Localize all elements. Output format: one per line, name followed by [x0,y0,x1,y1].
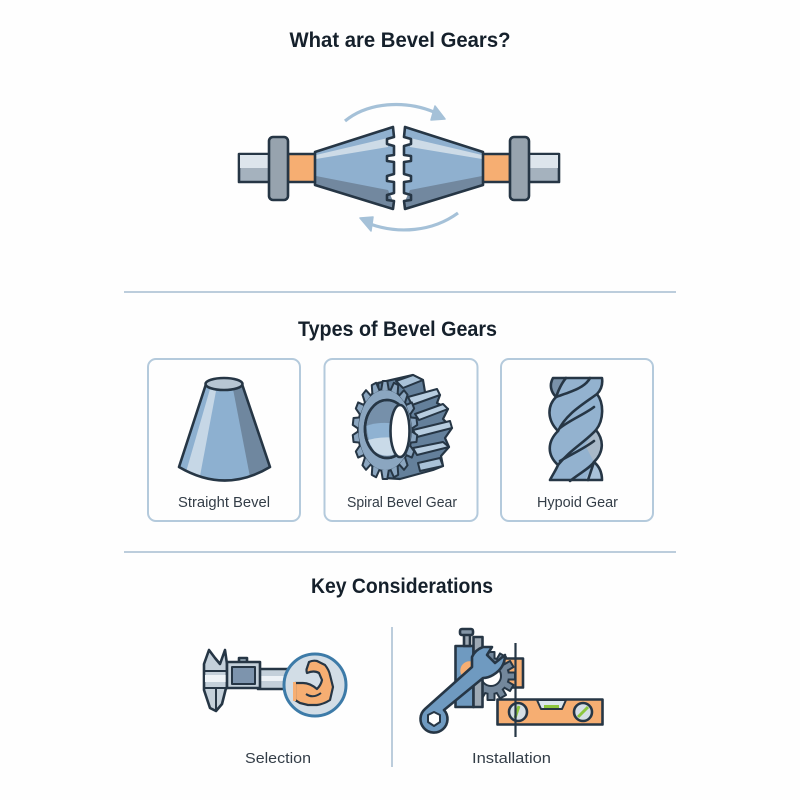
icon: gear bracket [456,629,523,707]
icon: spirit level [498,643,602,737]
title: What are Bevel Gears? [290,29,510,52]
arrow: rotation bottom [360,213,458,231]
icon: wrench [420,647,505,733]
panel: spiral bevel gear [324,359,478,521]
icon: hypoid gear [549,378,602,481]
icon: caliper [204,650,288,711]
icon: spiral bevel gear [352,375,452,479]
label: Installation [472,750,551,767]
left gear and shaft [239,127,394,209]
item: installation [420,629,602,767]
arrow: clockwise rotation top [345,105,445,121]
label: Hypoid Gear [537,494,618,511]
heading: types: Types of Bevel Gears [298,318,497,341]
label: Straight Bevel [178,494,270,511]
label: Spiral Bevel Gear [347,494,457,511]
panel: hypoid gear [501,359,653,521]
heading: key considerations: Key Considerations [311,575,493,598]
icon: strength circle [284,654,346,716]
panel: straight bevel [148,359,300,521]
right gear and shaft [404,127,559,209]
item: selection [204,650,346,767]
illustration: meshing bevel gears on shafts [239,105,559,231]
icon: straight bevel cone [179,378,270,480]
label: Selection [245,750,311,767]
